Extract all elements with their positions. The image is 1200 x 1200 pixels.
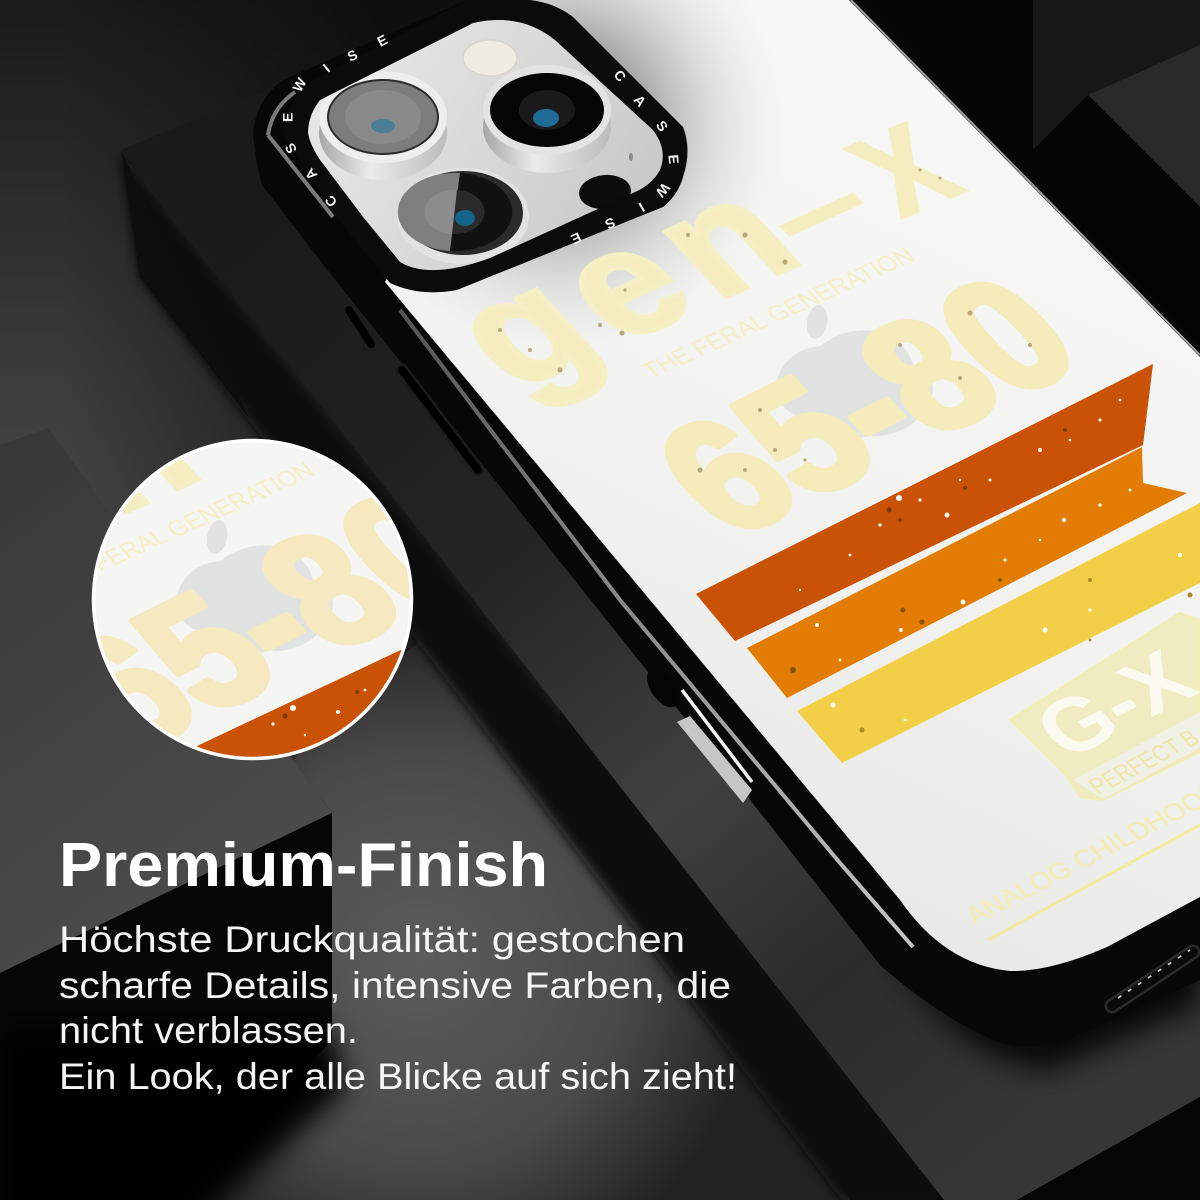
phone shadow: [900, 950, 1200, 1070]
body text: Höchste Druckqualität: gestochen: [59, 919, 685, 960]
zoom circle: [92, 438, 414, 760]
apple logo: [778, 305, 933, 438]
glass reflection strip: [268, 92, 333, 217]
red stripe: [696, 364, 1153, 641]
lens top left: [319, 71, 447, 180]
body text: nicht verblassen.: [59, 1010, 358, 1051]
CASEWISE right: CASEWISE: [569, 67, 682, 248]
flash: [463, 40, 517, 76]
plate edge right highlight: [851, 0, 1200, 355]
CASEWISE left: CASEWISE: [279, 31, 390, 210]
badge label panel: [1073, 712, 1200, 799]
title gen-x: x: [798, 71, 994, 249]
charging port: [1112, 950, 1193, 1006]
back plate: [385, 0, 1200, 971]
magnified subtitle: THE FERAL GENERATION: [36, 458, 321, 599]
years 65-80: 65-80: [617, 243, 1115, 568]
volume button: [402, 370, 478, 470]
title gen-x: -: [721, 138, 908, 276]
caption underline: [988, 825, 1200, 940]
glass window: [308, 20, 663, 270]
body text: Ein Look, der alle Blicke auf sich zieht!: [59, 1056, 737, 1097]
yellow stripe: [797, 503, 1200, 763]
speckles on lettering: [498, 168, 1032, 472]
top right block: [1033, 0, 1200, 207]
lens bottom: [397, 168, 529, 264]
black ring: [283, 0, 688, 292]
power button: [641, 663, 752, 803]
brand text on ring: [279, 31, 682, 248]
circle outline: [94, 440, 412, 758]
magnified gen-x: [122, 458, 202, 515]
edge highlight: [400, 310, 913, 947]
lower left block: [0, 428, 332, 1040]
sensor hole: [578, 173, 632, 211]
body text: [59, 919, 737, 1097]
magnified gen-x: -: [121, 353, 308, 491]
lens top right: [483, 65, 611, 173]
black shadow right of phone: [860, 0, 1200, 345]
microphone dot: [629, 153, 633, 161]
orange stripe: [747, 447, 1187, 698]
phone body: [253, 0, 1200, 1046]
circle background: [92, 440, 412, 760]
subtitle: THE FERAL GENERATION: [636, 243, 921, 384]
magnified apple logo: [177, 520, 333, 653]
title gen-x: gen: [412, 143, 845, 419]
heading: Premium-Finish: [59, 831, 548, 900]
body text: scharfe Details, intensive Farben, die: [59, 965, 731, 1006]
title gen-x: [472, 120, 970, 407]
block side face: [120, 156, 848, 1200]
phone: [253, 0, 1200, 1070]
lower right wedge: [1017, 1097, 1200, 1200]
silent switch: [349, 310, 371, 344]
circle content: [96, 442, 410, 757]
magnified years: 65-80: [17, 458, 515, 783]
magnified red stripe: [197, 650, 402, 757]
camera island: [268, 0, 688, 292]
floor light: [216, 645, 850, 1200]
